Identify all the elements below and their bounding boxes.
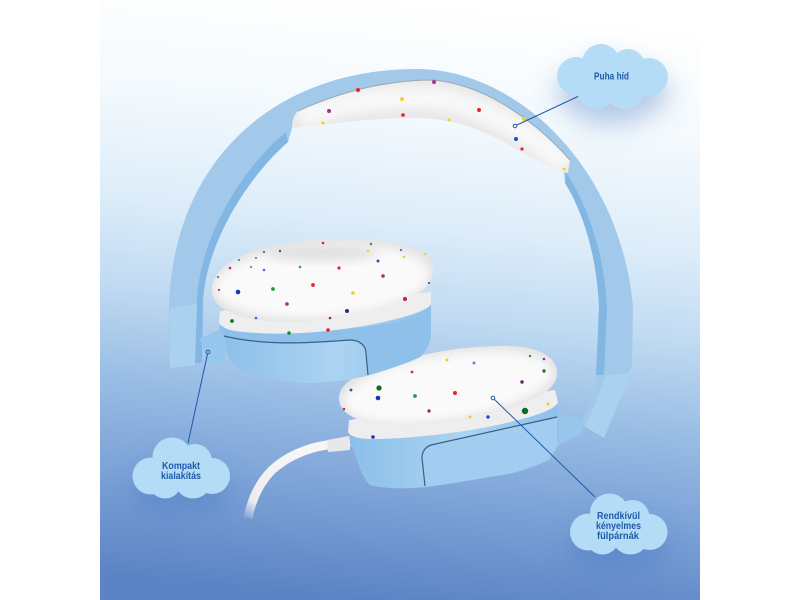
cloud label: Rendkívül bbox=[597, 510, 640, 522]
lower cushion bbox=[339, 346, 557, 419]
cloud label: Kompakt bbox=[162, 460, 200, 472]
right arm lower segment bbox=[584, 373, 631, 438]
headphones bbox=[169, 69, 633, 518]
cloud label bbox=[596, 510, 641, 542]
lower cup panel bbox=[422, 417, 557, 486]
leader line: Kompakt kialakítás bbox=[188, 350, 210, 443]
upper hinge bbox=[199, 329, 226, 363]
cloud label: kialakítás bbox=[161, 470, 201, 482]
callout: Kompakt kialakítás bbox=[132, 438, 230, 498]
cloud label: Puha híd bbox=[594, 70, 629, 82]
headband pad bbox=[292, 80, 570, 173]
lower hinge bbox=[557, 410, 583, 447]
cloud shape bbox=[132, 438, 230, 498]
leader line: Puha híd bbox=[513, 96, 579, 128]
background panel bbox=[100, 0, 700, 600]
infographic canvas bbox=[100, 43, 700, 600]
callout: Puha híd bbox=[557, 44, 668, 109]
inner side shade, right bbox=[565, 172, 607, 375]
pad dots, upper cushion bbox=[217, 242, 430, 335]
cloud shape bbox=[557, 44, 668, 109]
upper cup panel bbox=[224, 312, 431, 375]
inner side shade, left bbox=[195, 132, 288, 363]
cable bbox=[248, 436, 350, 518]
cloud shape bbox=[570, 494, 668, 554]
cloud label: kényelmes bbox=[596, 520, 641, 532]
left arm lower segment bbox=[170, 304, 197, 368]
callout: Rendkívül kényelmes fülpárnák bbox=[570, 494, 668, 554]
lower cushion ring bbox=[348, 390, 558, 439]
cloud label: fülpárnák bbox=[597, 530, 639, 542]
upper cushion ring bbox=[219, 292, 431, 334]
pad dots, headband bbox=[322, 80, 565, 170]
leader line: Rendkívül kényelmes fülpárnák bbox=[491, 396, 595, 497]
pad dots, lower cushion bbox=[343, 355, 550, 439]
cloud label bbox=[161, 460, 201, 482]
headband bbox=[169, 69, 633, 438]
upper cushion bbox=[212, 237, 433, 325]
lower ear cup bbox=[349, 404, 583, 488]
upper ear cup bbox=[199, 300, 431, 383]
